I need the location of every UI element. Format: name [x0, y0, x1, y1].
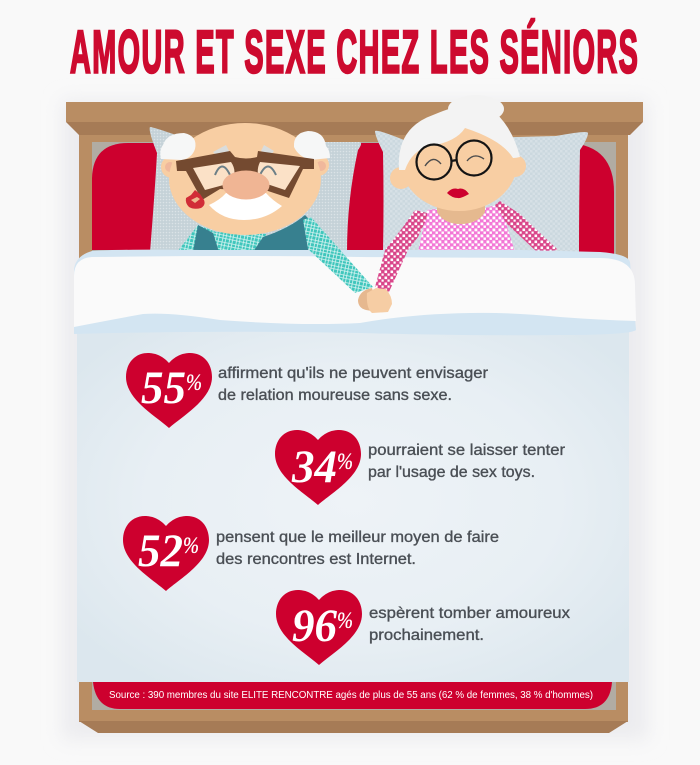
- headboard top rail: [66, 102, 643, 122]
- stat 3: text: pensent que le meilleur moyen de faire: [216, 529, 499, 546]
- stat 1: heart: 55: [141, 362, 186, 414]
- arm: grandfather: [303, 217, 373, 293]
- arm: grandmother: [375, 210, 427, 292]
- character: grandmother: [390, 95, 558, 252]
- stat 4: heart: 96: [292, 600, 337, 652]
- neck: [437, 205, 485, 224]
- dress: [418, 204, 515, 252]
- stat 2: text: [368, 442, 565, 481]
- character: grandfather: [160, 123, 330, 252]
- stat 1: heart: %: [186, 370, 202, 395]
- sheet: [74, 250, 636, 335]
- stat 1: heart: [126, 353, 212, 428]
- head: [401, 115, 517, 211]
- stat 1: text: affirment qu'ils ne peuvent envisager: [218, 365, 488, 382]
- ears: [390, 167, 412, 189]
- stat 2: heart: %: [337, 449, 353, 474]
- stat 3: text: [216, 529, 499, 568]
- stat 4: heart: %: [337, 608, 353, 633]
- stat 3: heart: [123, 516, 209, 591]
- headboard red cushions: [92, 143, 614, 256]
- glasses: [176, 151, 314, 200]
- holding hands: [358, 288, 392, 313]
- lipstick kiss: [186, 190, 205, 209]
- stat 2: text: pourraient se laisser tenter: [368, 442, 565, 459]
- hair bun: [448, 95, 504, 123]
- stat 1: text: de relation moureuse sans sexe.: [218, 387, 452, 404]
- ears: [161, 156, 183, 178]
- vest: [193, 215, 310, 252]
- shirt left: [177, 225, 266, 252]
- eyebrows: [213, 145, 274, 157]
- right sleeve: [495, 201, 558, 252]
- moustache: [209, 193, 282, 220]
- pillow: right: [375, 131, 588, 252]
- stat 2: text: par l'usage de sex toys.: [368, 464, 535, 481]
- stat 4: heart: [276, 590, 362, 665]
- source band: Source : 390 membres du site ELITE RENCONTRE agés de plus de 55 ans (62 % de femmes, 38 % d'hommes): [109, 690, 593, 701]
- stat 2: heart: [275, 430, 361, 505]
- head: [169, 123, 321, 235]
- stat 3: text: des rencontres est Internet.: [216, 551, 416, 568]
- pillow: left: [150, 127, 361, 252]
- stat 4: text: prochainement.: [369, 627, 484, 644]
- stat 1: text: [218, 365, 488, 404]
- lips: [447, 188, 469, 198]
- stat 4: text: espèrent tomber amoureux: [369, 605, 570, 622]
- nose: [222, 170, 270, 200]
- source band: [93, 682, 612, 709]
- stat 3: heart: 52: [138, 525, 183, 577]
- stat 2: heart: 34: [291, 441, 337, 493]
- bed frame: [66, 102, 643, 733]
- title: AMOUR ET SEXE CHEZ LES SÉNIORS: [70, 18, 638, 85]
- stat 4: text: [369, 605, 570, 644]
- hair tufts: [160, 133, 196, 160]
- blanket body: [77, 320, 629, 682]
- glasses: [416, 140, 492, 180]
- hair: [399, 108, 520, 170]
- stat 3: heart: %: [183, 533, 199, 558]
- eyes: [215, 166, 276, 175]
